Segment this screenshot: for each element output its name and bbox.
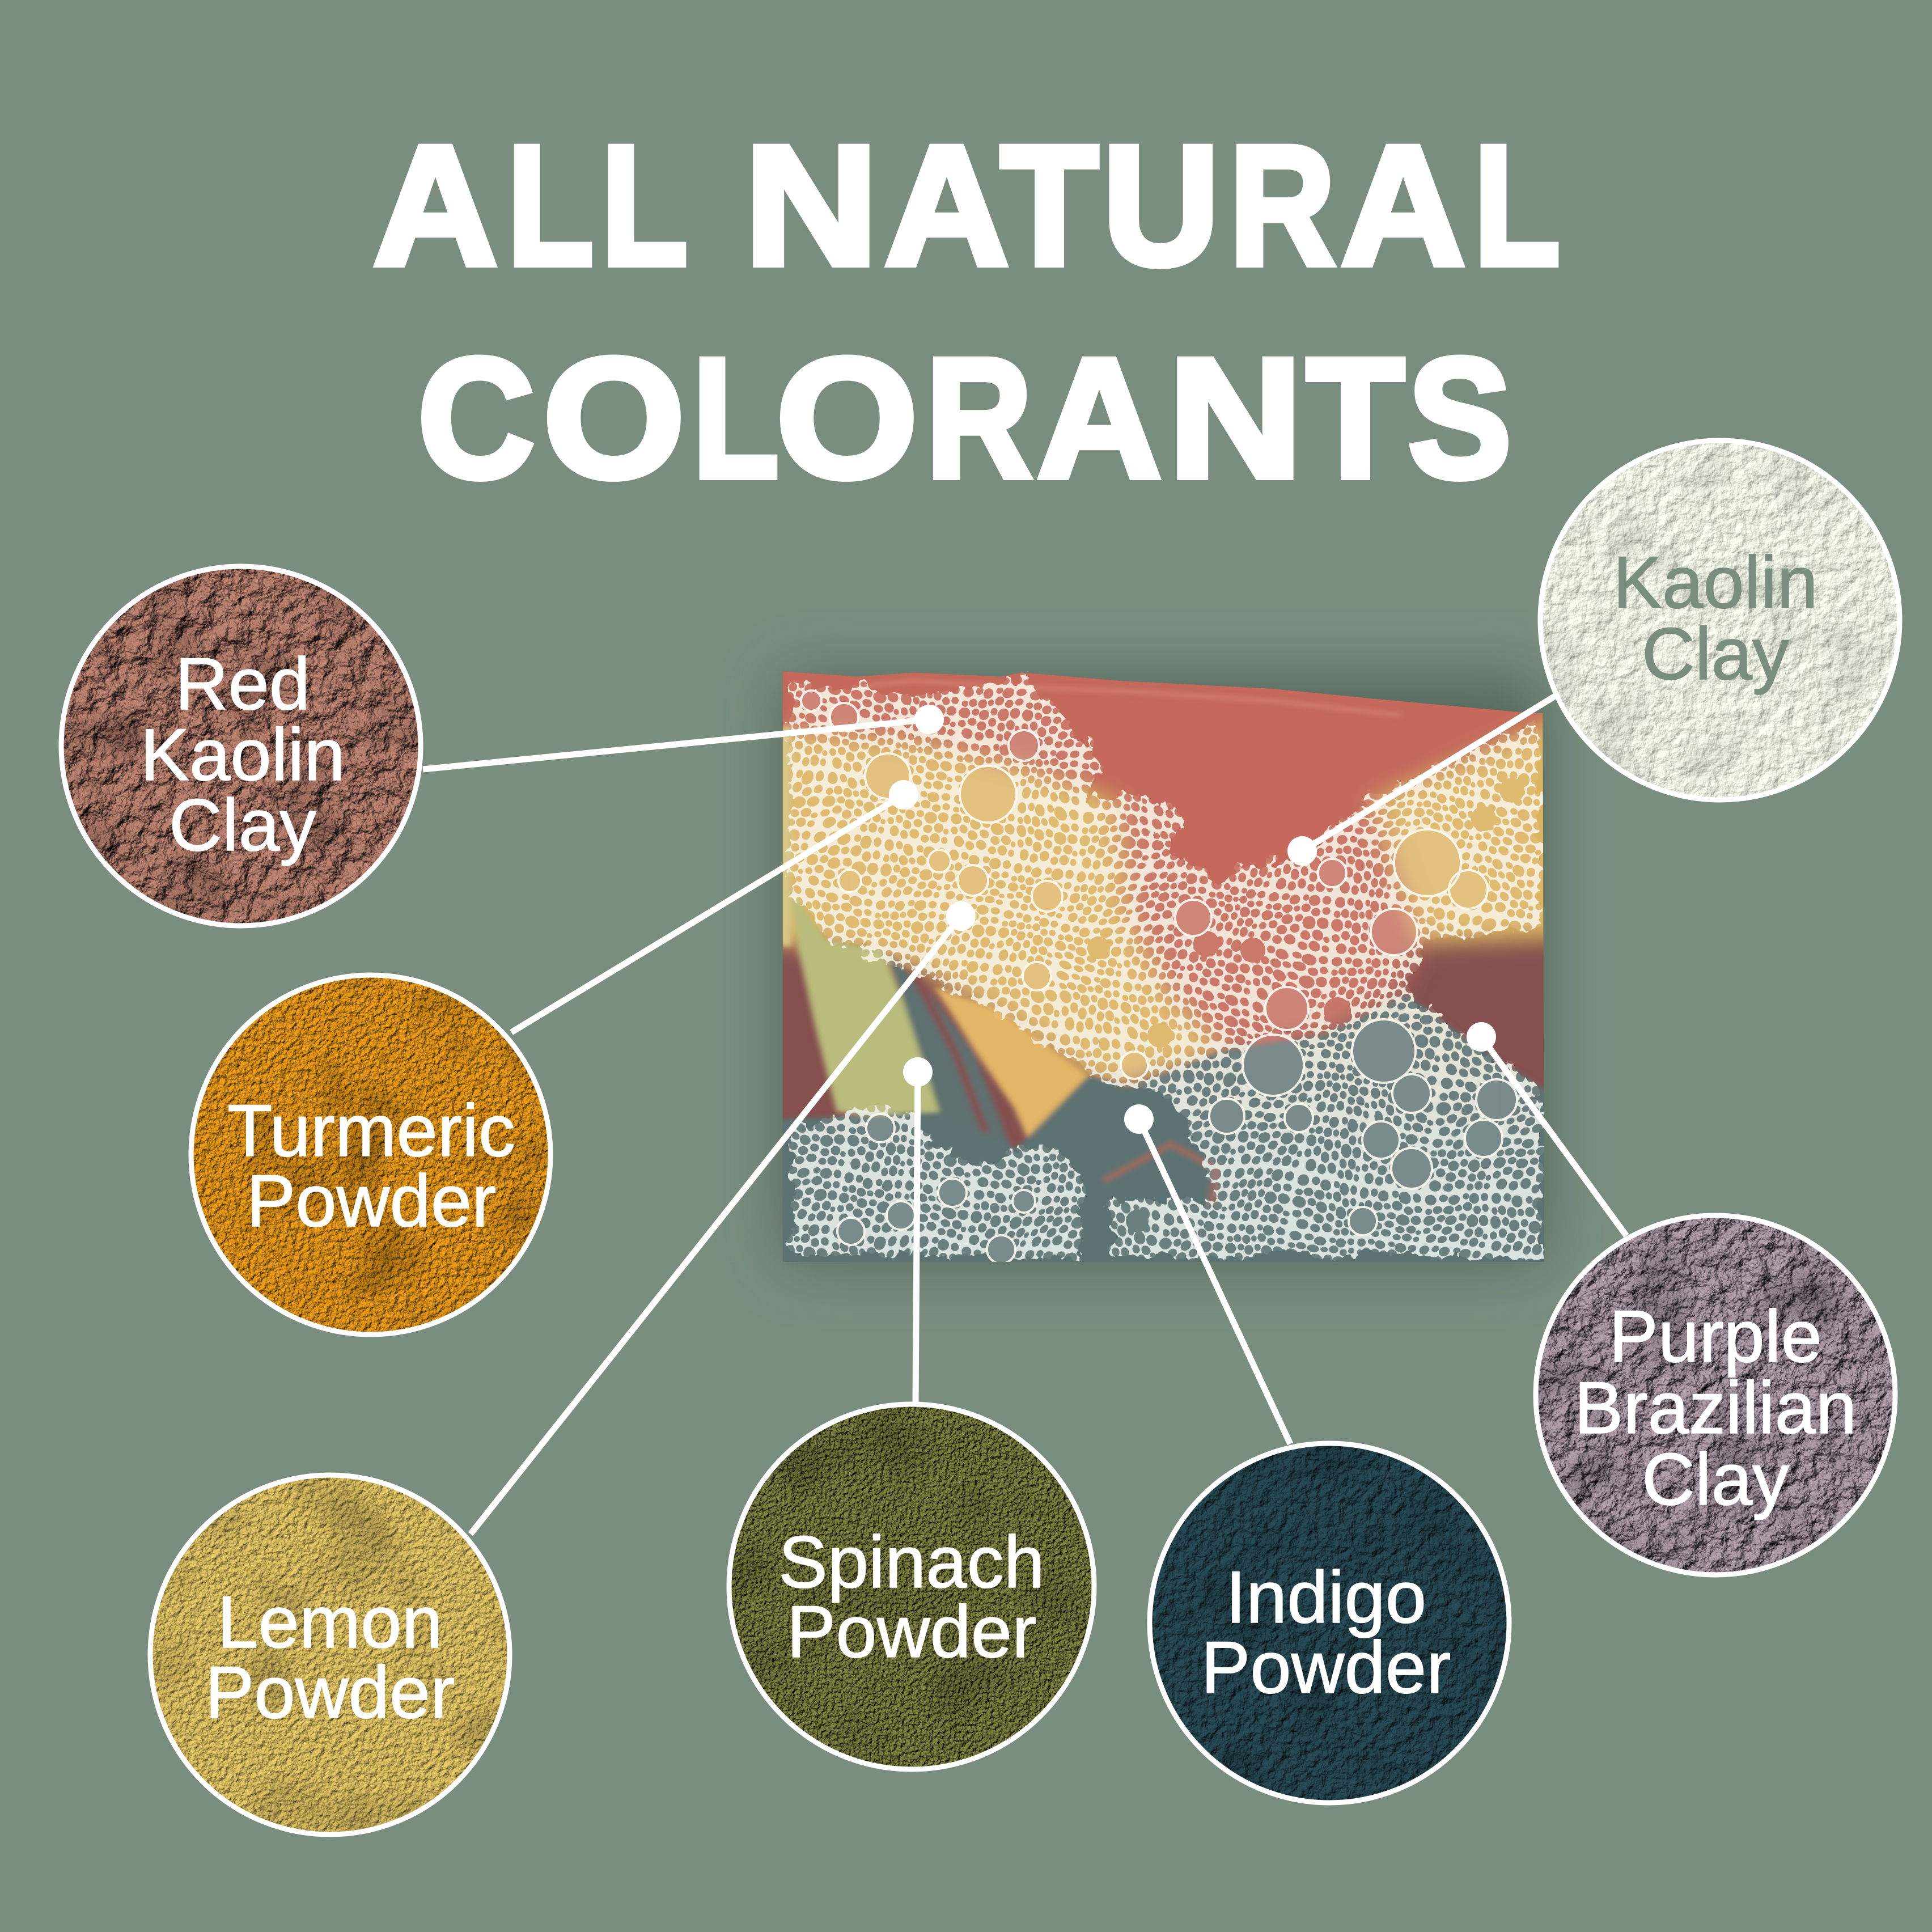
- circle: turmeric powder: Turmeric: [227, 1089, 515, 1172]
- title: R: [1230, 111, 1335, 300]
- connector: red kaolin clay: [423, 705, 944, 769]
- large bubbles: [801, 690, 1517, 1264]
- connector: spinach powder: [903, 1057, 933, 1402]
- soap foam: [785, 672, 1544, 1262]
- title: [374, 110, 1560, 514]
- circle: red kaolin clay: Red: [175, 642, 310, 725]
- soap base: purple clay: [782, 671, 1544, 1262]
- connector: purple brazilian clay: [1467, 1022, 1626, 1236]
- soap colour swirls in the clear areas: [782, 679, 1544, 1262]
- title: T: [1001, 110, 1098, 300]
- title: N: [1168, 323, 1302, 513]
- circle: lemon powder: Lemon: [217, 1581, 443, 1663]
- title: C: [418, 323, 535, 514]
- title: N: [744, 111, 878, 300]
- title: A: [885, 110, 1009, 300]
- circle: red kaolin clay: Kaolin: [140, 713, 345, 796]
- circle: indigo powder: Indigo: [1226, 1556, 1426, 1638]
- title: O: [776, 323, 918, 513]
- circle: spinach powder: Powder: [787, 1590, 1036, 1673]
- title: A: [1037, 323, 1161, 513]
- soap shadow: [783, 677, 1544, 1262]
- circle: kaolin clay: [1540, 440, 1900, 800]
- title: L: [693, 323, 779, 513]
- circle: red kaolin clay: [61, 566, 421, 926]
- circle: spinach powder: [729, 1404, 1094, 1769]
- circle: lemon powder: [150, 1475, 510, 1834]
- connector: indigo powder: [1124, 1104, 1290, 1444]
- circle: turmeric powder: Powder: [247, 1159, 496, 1242]
- title: L: [507, 111, 594, 300]
- circle: purple brazilian clay: Clay: [1642, 1438, 1789, 1520]
- circle: lemon powder: Powder: [205, 1651, 455, 1734]
- circle: kaolin clay: Kaolin: [1613, 541, 1818, 624]
- title: L: [601, 111, 688, 300]
- title: L: [1474, 111, 1560, 300]
- circle: purple brazilian clay: Brazilian: [1574, 1366, 1857, 1449]
- circle: spinach powder: Spinach: [778, 1520, 1045, 1603]
- title: U: [1103, 111, 1219, 301]
- title: A: [1341, 110, 1465, 300]
- connector: turmeric powder: [511, 780, 918, 1032]
- circle: purple brazilian clay: [1536, 1215, 1895, 1575]
- title: R: [926, 324, 1032, 513]
- circle: red kaolin clay: Clay: [169, 783, 316, 866]
- circle: turmeric powder: [191, 975, 550, 1334]
- circle: indigo powder: [1150, 1443, 1509, 1803]
- title: O: [543, 323, 685, 513]
- connector: lemon powder: [471, 901, 976, 1534]
- title: A: [374, 110, 497, 300]
- circle: kaolin clay: Clay: [1642, 612, 1789, 695]
- soap colour swirls under the foam: [782, 671, 1543, 1088]
- connector: kaolin clay: [1287, 696, 1555, 866]
- title: S: [1408, 323, 1511, 513]
- circle: purple brazilian clay: Purple: [1609, 1295, 1822, 1378]
- title: T: [1307, 323, 1404, 513]
- circle: indigo powder: Powder: [1201, 1626, 1451, 1709]
- soap bar: [760, 646, 1581, 1294]
